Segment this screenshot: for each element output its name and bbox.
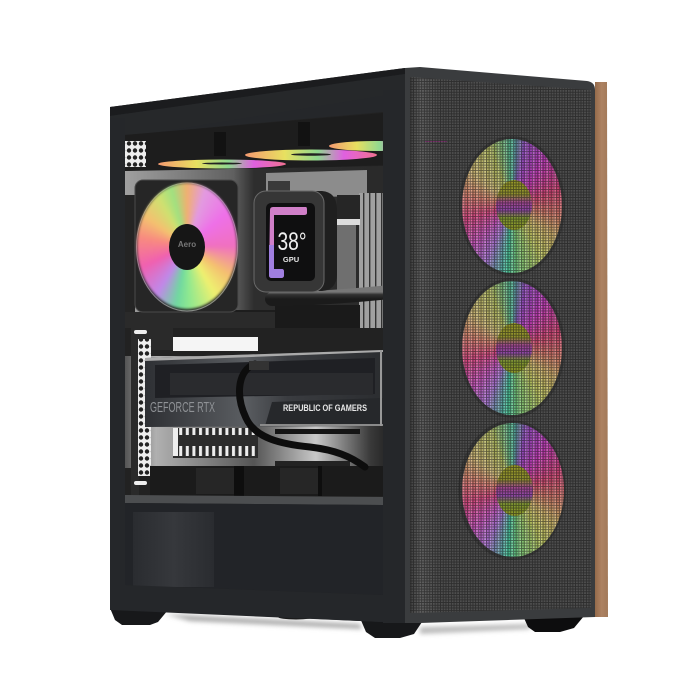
- window frame bottom: [125, 585, 383, 622]
- slot covers: [173, 428, 258, 458]
- frame right: [383, 90, 405, 623]
- front fan 1: [459, 136, 565, 276]
- side fan: [134, 180, 240, 312]
- text: GEFORCE RTX: GEFORCE RTX: [150, 399, 215, 416]
- wood side panel: [595, 82, 608, 617]
- PCI bracket: [131, 325, 173, 495]
- fan hub: Aero: [178, 240, 196, 249]
- pump block: [254, 191, 337, 292]
- bottom fans: [150, 466, 383, 496]
- temperature readout: 38°: [278, 228, 306, 256]
- front fan 3: [458, 420, 566, 560]
- pump screen: [266, 203, 315, 281]
- AIO tube: [272, 292, 390, 299]
- white expansion strip: [173, 337, 258, 351]
- text: REPUBLIC OF GAMERS: REPUBLIC OF GAMERS: [283, 403, 367, 414]
- cable connector: [249, 361, 269, 370]
- feet: [110, 608, 584, 638]
- front fan 2: [459, 278, 565, 418]
- cooling cable: [240, 364, 365, 467]
- gray motherboard panel: [266, 170, 367, 198]
- graphics card: [145, 350, 383, 427]
- upper chamber wall: [125, 166, 383, 350]
- motherboard lower slot: [275, 429, 360, 434]
- mesh base: [410, 77, 591, 613]
- case side panel: [110, 68, 421, 623]
- magenta reflection: [425, 141, 447, 142]
- PSU shroud: [125, 495, 383, 595]
- front panel: [405, 67, 595, 623]
- lower chamber: [125, 328, 383, 360]
- GPU label: GPU: [283, 255, 299, 264]
- top fan bracket: [125, 113, 383, 175]
- top fan rgb slivers: [158, 141, 383, 168]
- lower dark pump block: [275, 305, 360, 345]
- floor shadow: [165, 614, 530, 634]
- window interior: [125, 112, 383, 621]
- mesh overlay: [410, 77, 591, 613]
- radiator fins: [359, 193, 383, 345]
